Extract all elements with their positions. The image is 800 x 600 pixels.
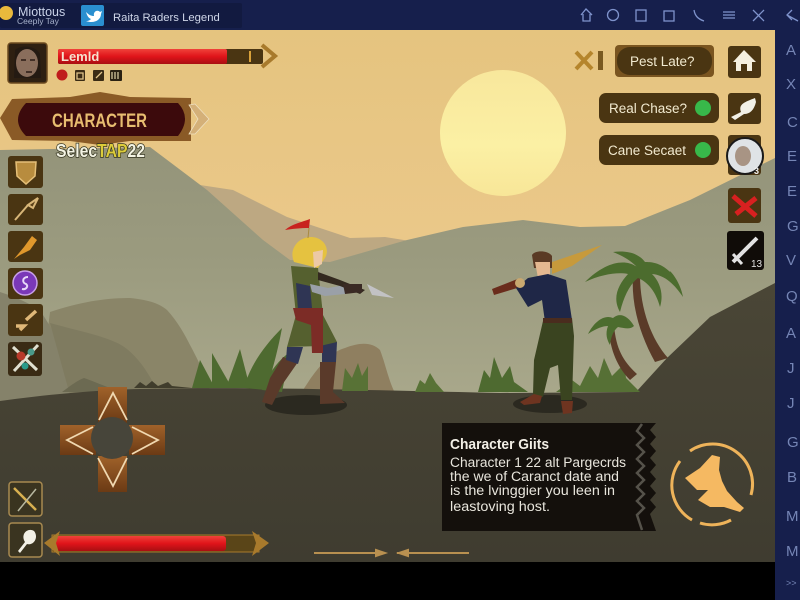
icon: dagger <box>16 311 36 330</box>
status icons <box>56 70 122 81</box>
right sidebar: E <box>787 148 797 165</box>
right sidebar: M <box>786 508 798 525</box>
button: past late <box>615 45 714 77</box>
action button <box>672 444 753 525</box>
crossed swords marker <box>576 51 603 70</box>
right sidebar: Q <box>786 288 798 305</box>
right icon: portrait <box>727 135 763 176</box>
icon: bird tile <box>81 5 104 26</box>
button: cane secaet: Cane Secaet <box>608 143 686 158</box>
info panel <box>442 423 656 531</box>
right icon: home <box>728 46 761 78</box>
right sidebar: C <box>787 114 798 131</box>
health bar <box>58 45 275 67</box>
character: spear fighter <box>262 219 394 415</box>
mid ridges <box>40 298 210 395</box>
icon: white bone <box>18 530 36 553</box>
right icon: portrait: 3 <box>754 166 759 176</box>
directional pad <box>60 387 165 492</box>
panel body <box>450 455 626 514</box>
right sidebar: B <box>787 469 797 486</box>
button: real chase <box>599 93 719 123</box>
right sidebar: J <box>787 360 794 377</box>
right icon: sword count <box>727 231 764 270</box>
bottom black band <box>0 562 775 600</box>
palm trees <box>585 252 683 380</box>
right sidebar: A <box>786 325 796 342</box>
sun <box>440 70 566 196</box>
right sidebar: X <box>786 76 796 93</box>
far tan ridge <box>200 185 410 300</box>
app title: Raita Raders Legend <box>113 12 220 24</box>
left skill icons <box>8 156 43 376</box>
player portrait <box>8 43 47 83</box>
right sidebar: E <box>787 183 797 200</box>
right sidebar <box>775 30 800 600</box>
icon: fork spear <box>15 198 38 220</box>
right sidebar: A <box>786 42 796 59</box>
button: cane secaet <box>599 135 719 165</box>
main mountain range <box>0 147 775 410</box>
panel body: the we of Caranct date and <box>450 469 619 484</box>
ground <box>0 283 775 562</box>
panel body: leastoving host. <box>450 499 550 514</box>
button: real chase: Real Chase? <box>609 101 687 116</box>
grass clumps <box>134 328 640 392</box>
bar label: Lemld <box>61 49 99 64</box>
right sidebar: V <box>786 252 796 269</box>
character banner <box>0 92 209 145</box>
button: past late: Pest Late? <box>630 54 695 69</box>
character: sword fighter <box>492 245 602 414</box>
icon: shield <box>16 162 36 184</box>
logo coin <box>0 6 13 20</box>
right icon: red cross <box>728 188 761 223</box>
right icon: goblet <box>728 93 761 124</box>
bottom progress arrows <box>314 550 469 556</box>
top bar <box>0 0 800 30</box>
right sidebar: G <box>787 218 799 235</box>
icon: knot emblem <box>13 345 38 371</box>
right sidebar: G <box>787 434 799 451</box>
panel heading: Character Giits <box>450 436 549 453</box>
bottom left tool buttons <box>9 482 42 557</box>
icon: purple orb <box>13 271 37 295</box>
app name: Miottous <box>18 5 65 19</box>
panel body: is the lvinggier you leen in <box>450 483 615 498</box>
top bar: Ceeply Tay <box>17 16 60 26</box>
right sidebar: M <box>786 543 798 560</box>
bottom bar <box>44 531 269 556</box>
icon: golden club <box>14 236 37 259</box>
panel body: Character 1 22 alt Pargecrds <box>450 455 626 470</box>
banner title: CHARACTER <box>52 111 147 132</box>
right sidebar: J <box>787 395 794 412</box>
right sidebar: >> <box>786 578 797 588</box>
right icon: sword count: 13 <box>751 259 763 270</box>
toolbar icons <box>581 9 798 21</box>
banner subtitle: SelecTAP22 <box>56 141 145 161</box>
